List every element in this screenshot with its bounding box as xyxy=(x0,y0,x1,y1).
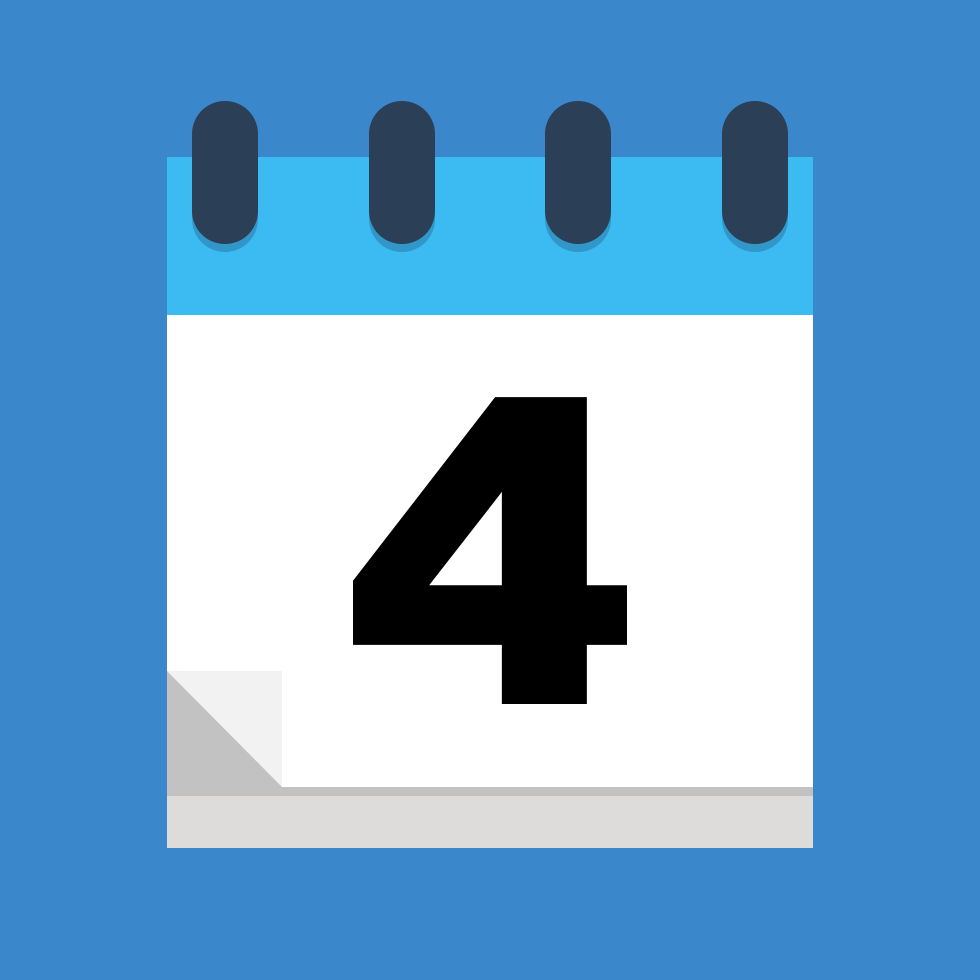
binding ring 1 xyxy=(192,101,258,252)
date number: 4 xyxy=(348,314,629,786)
folded corner xyxy=(167,671,282,796)
white page xyxy=(167,315,813,796)
calendar xyxy=(167,101,813,848)
binding ring 3 xyxy=(545,101,611,252)
calendar header band xyxy=(167,157,813,315)
binding ring 4 xyxy=(722,101,788,252)
binding ring 2 xyxy=(369,101,435,252)
bottom page stack xyxy=(167,796,813,848)
page shadow line xyxy=(167,787,813,796)
